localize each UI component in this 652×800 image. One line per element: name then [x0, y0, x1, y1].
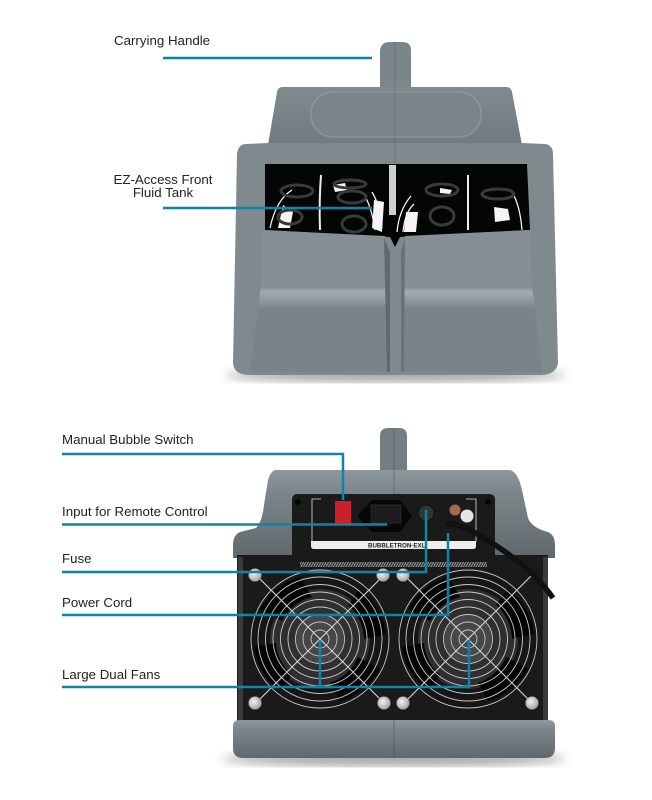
- fuse: [418, 505, 434, 521]
- base: [233, 720, 555, 758]
- brand strip: [311, 541, 476, 549]
- hatch band: [300, 562, 487, 567]
- label: EZ-Access Front Fluid Tank: EZ-Access Front: [113, 172, 213, 187]
- label: Manual Bubble Switch: Manual Bubble Switch: [62, 432, 194, 447]
- black rear panel: [237, 555, 548, 721]
- label: EZ-Access Front Fluid Tank: Fluid Tank: [133, 185, 194, 200]
- switch: [335, 501, 351, 524]
- leader lines: [62, 58, 469, 687]
- label: Fuse: Fuse: [62, 551, 92, 566]
- copper light: [450, 504, 460, 516]
- brand name: BUBBLETRON·EXL: [368, 543, 426, 550]
- tank cover: [250, 230, 542, 372]
- control panel: [292, 494, 495, 557]
- power inlet: [357, 500, 412, 532]
- fluid tank window: [265, 164, 530, 247]
- label: Input for Remote Control: Input for Remote Control: [62, 504, 208, 519]
- label: Power Cord: Power Cord: [62, 595, 132, 610]
- device: rear view of machine: [222, 428, 566, 766]
- label: Large Dual Fans: Large Dual Fans: [62, 667, 161, 682]
- screws: [248, 568, 538, 710]
- fans: [250, 569, 538, 709]
- power cord: [446, 524, 553, 598]
- device: front view of machine: [225, 42, 565, 382]
- label: Carrying Handle: Carrying Handle: [114, 33, 210, 48]
- carrying handle: [380, 42, 411, 87]
